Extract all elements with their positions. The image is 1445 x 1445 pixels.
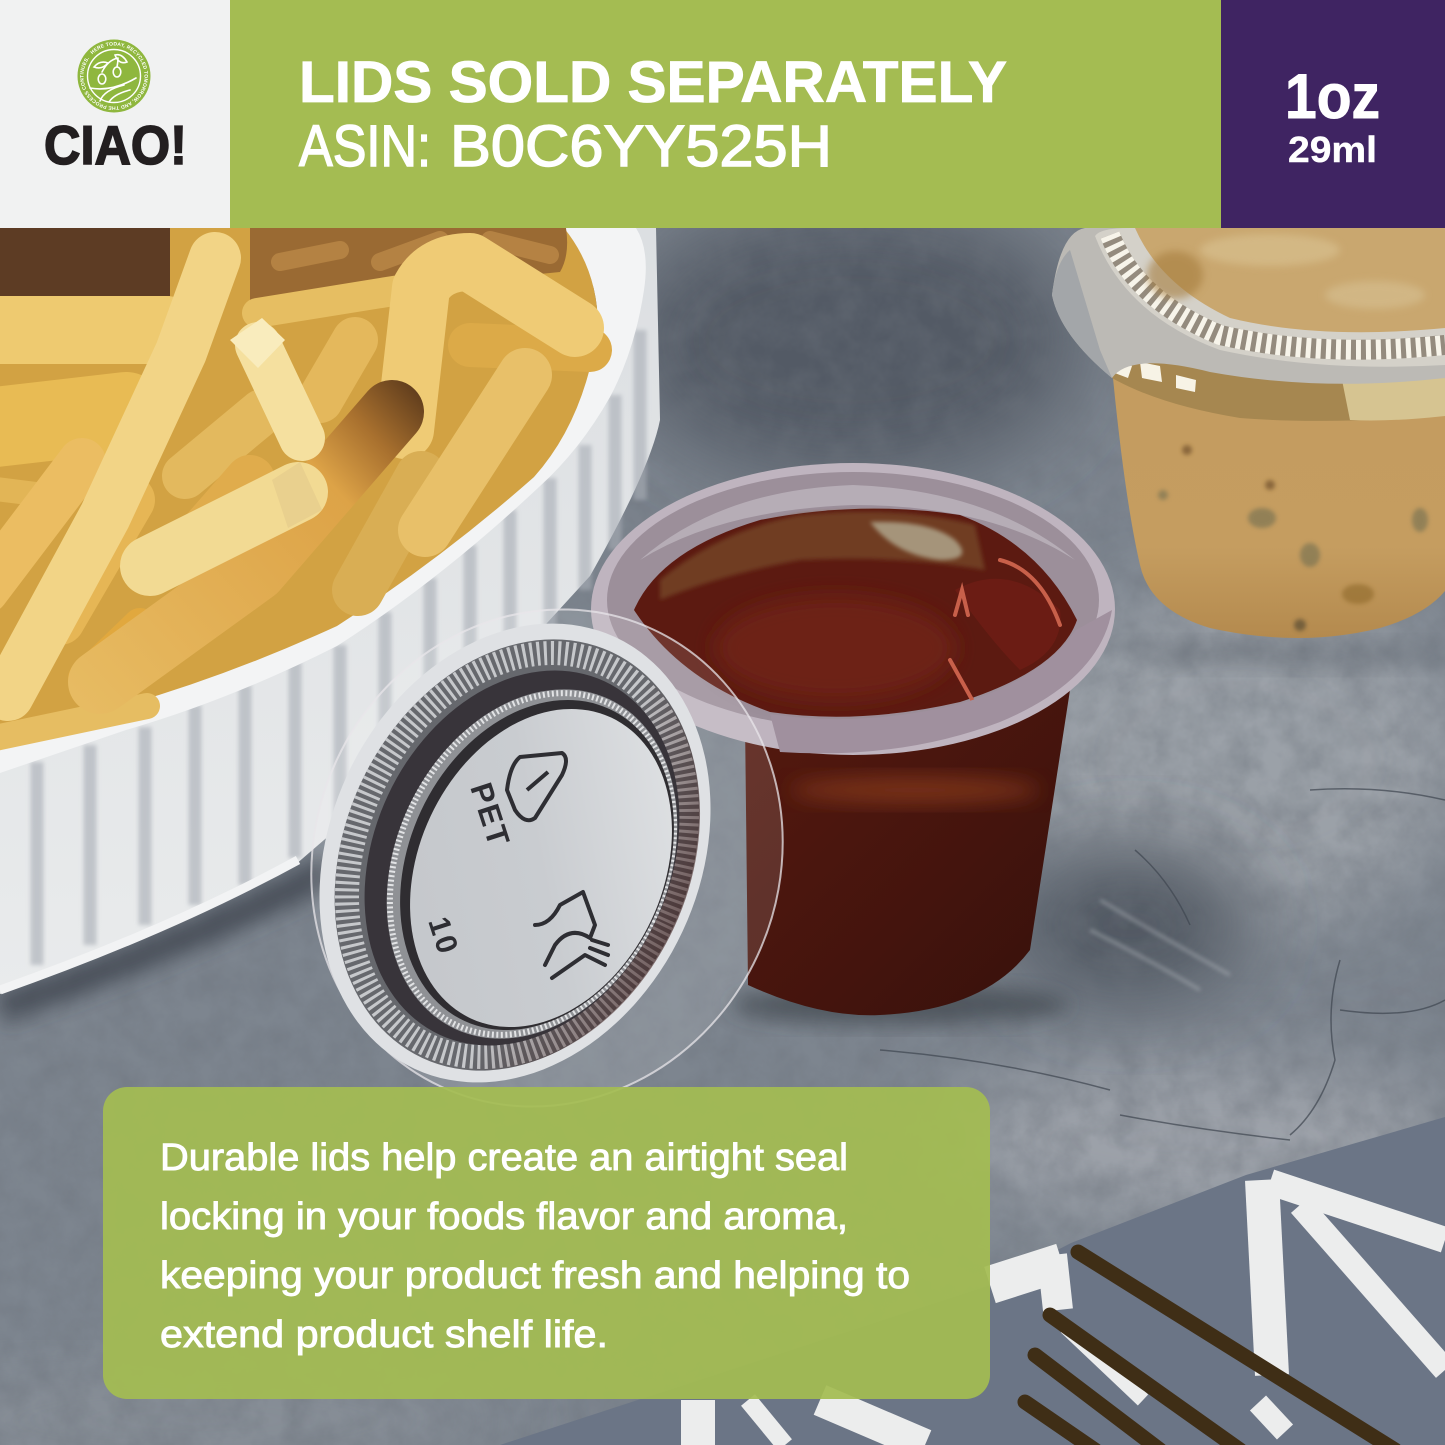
patterned napkin with fork	[500, 1117, 1445, 1445]
logo badge: HERE TODAY, RECYCLED TOMORROW, AND THE PROCESS CONTINUES.	[80, 42, 148, 110]
lid flange	[1052, 228, 1445, 384]
cup body	[745, 690, 1070, 1015]
french fries in the dish	[0, 228, 598, 750]
embossed recycling triangle and PET	[463, 753, 566, 850]
ASIN line	[299, 114, 832, 179]
callout: durable lids description: keeping your product fresh and helping to	[160, 1255, 910, 1297]
size in ounces: 1oz	[1285, 62, 1380, 132]
header: size badge	[1221, 0, 1445, 228]
callout: durable lids description: locking in your foods flavor and aroma,	[160, 1196, 848, 1238]
lid centre disc	[360, 666, 722, 1070]
cup rim	[591, 463, 1115, 755]
outer clear flange	[230, 532, 864, 1184]
callout: durable lids description	[103, 1087, 990, 1399]
sauce line under lid	[1112, 350, 1445, 421]
ketchup cup	[591, 463, 1115, 1025]
embossed recycling triangle and PET: PET	[463, 778, 516, 850]
header: logo panel	[0, 0, 230, 228]
fork tines	[1025, 1252, 1395, 1445]
ketchup surface	[634, 509, 1077, 717]
ribbed ring	[283, 597, 751, 1113]
small sauce cup, background right	[1052, 228, 1445, 669]
lid leaning against cup	[230, 532, 864, 1184]
embossed food safe symbol	[535, 892, 608, 978]
size in millilitres: 29ml	[1288, 129, 1377, 170]
title line: LIDS SOLD SEPARATELY	[299, 50, 1007, 115]
ASIN line: ASIN:	[299, 114, 431, 179]
embossed number 10: 10	[421, 913, 464, 957]
header: title banner	[230, 0, 1221, 228]
callout: durable lids description: extend product shelf life.	[160, 1314, 608, 1356]
ASIN line: B0C6YY525H	[450, 114, 832, 179]
lid ribs	[1110, 235, 1445, 350]
white ribbed dish	[0, 228, 660, 994]
cup lower rim band	[770, 610, 1112, 753]
dish rim	[0, 228, 646, 773]
callout: durable lids description: Durable lids help create an airtight seal	[160, 1137, 848, 1179]
logo wordmark: CIAO!	[44, 114, 187, 176]
